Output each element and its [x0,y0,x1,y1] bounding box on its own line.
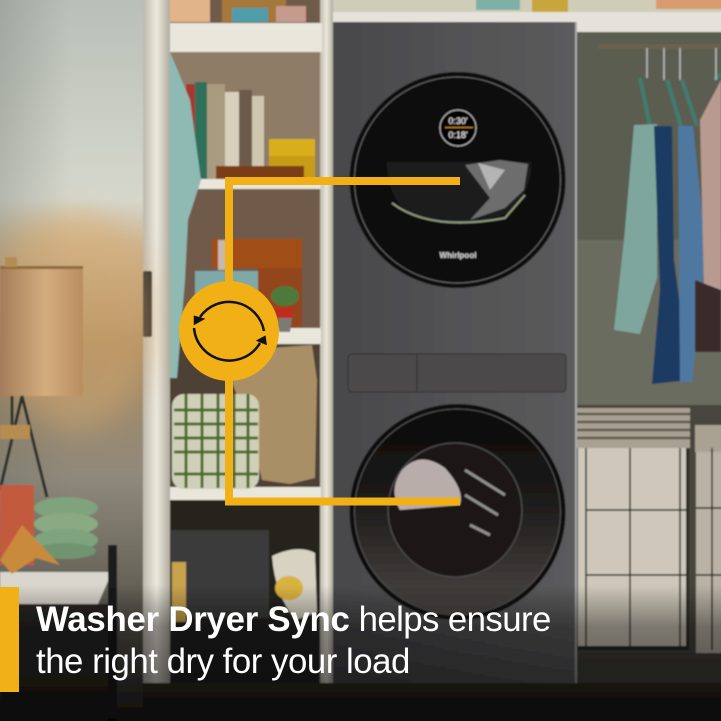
connector lines [229,181,460,502]
hanging teal garment [170,52,201,378]
table lamp [0,210,155,497]
books [186,82,315,179]
beige bag [232,345,317,484]
control display [440,110,476,146]
shelving interior [170,0,322,605]
laundry baskets [577,408,721,653]
table with decor [0,485,117,721]
washer door [350,404,566,620]
door latch [143,271,152,337]
background wall [0,0,145,721]
top shelf items [170,0,306,22]
bottom dark overlay [0,585,721,721]
pedestal drawer [348,354,566,392]
shelving posts [143,0,170,721]
floor [143,683,721,721]
control display: 0:18' [448,130,468,140]
washer window [388,443,522,577]
shelves [170,23,322,500]
accent bar [0,587,19,692]
slippers and crates [171,530,317,622]
closet hangers and clothes [598,44,721,384]
brand logo: Whirlpool [440,251,476,260]
sync icon [179,281,279,381]
orange boxes [195,239,302,328]
caption: Washer Dryer Sync helps ensure [36,600,551,639]
closet back wall [577,0,721,721]
caption second line: the right dry for your load [36,642,410,681]
dryer door [350,72,566,288]
dryer window [387,160,531,223]
washer dryer tower [333,22,577,683]
plaid lunch bag [172,394,259,489]
control display: 0:30' [448,116,468,126]
cactus [271,286,299,332]
top shelf right [320,0,721,12]
